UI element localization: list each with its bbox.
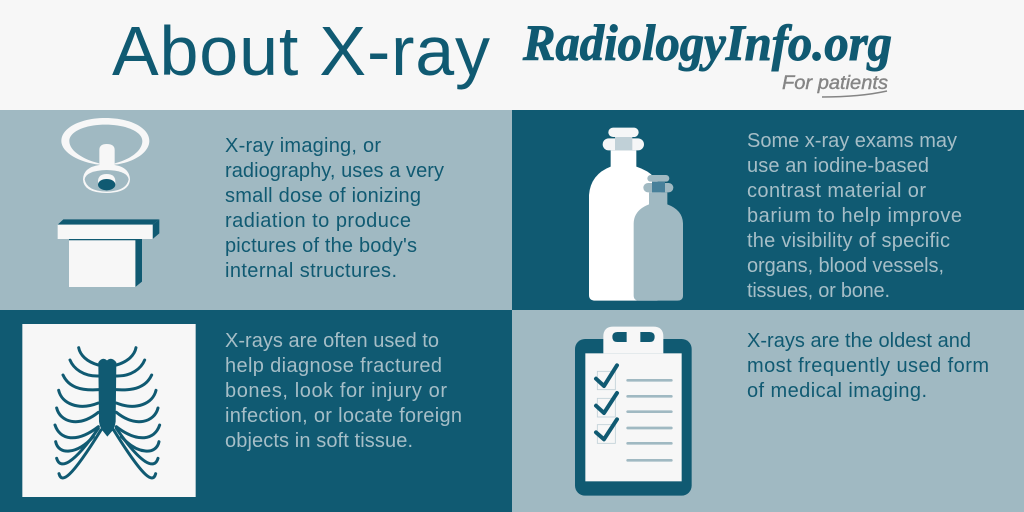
text: oldest imaging description: most frequently used form — [747, 355, 989, 377]
panel: diagnosis — [0, 310, 512, 512]
icon: bottles — [589, 128, 683, 301]
text: contrast description: use an iodine-based — [747, 155, 929, 177]
text: radiography description: small dose of ionizing — [225, 185, 421, 207]
text: contrast description: contrast material or — [747, 180, 926, 202]
text: diagnosis description: help diagnose fractured — [225, 355, 442, 377]
text: diagnosis description: infection, or locate foreign — [225, 405, 462, 427]
text: diagnosis description — [225, 330, 462, 452]
panel: oldest imaging — [512, 310, 1024, 512]
text: diagnosis description: objects in soft tissue. — [225, 430, 413, 452]
text: oldest imaging description — [747, 330, 989, 402]
text: contrast description — [747, 130, 962, 302]
logo: RadiologyInfo.org — [522, 16, 892, 97]
panel: radiography — [0, 110, 512, 310]
text: radiography description: internal structures. — [225, 260, 397, 282]
text: radiography description: X-ray imaging, or — [225, 135, 381, 157]
text: radiography description — [225, 135, 444, 282]
logo: RadiologyInfo.org: RadiologyInfo.org — [522, 16, 892, 72]
icon: clipboard — [575, 327, 692, 496]
logo: RadiologyInfo.org: For patients — [782, 73, 889, 94]
text: radiography description: radiography, uses a very — [225, 160, 444, 182]
text: contrast description: Some x-ray exams may — [747, 130, 957, 152]
text: diagnosis description: X-rays are often used to — [225, 330, 439, 352]
text: diagnosis description: bones, look for injury or — [225, 380, 447, 402]
panel: contrast material — [512, 110, 1024, 311]
text: contrast description: barium to help improve — [747, 205, 962, 227]
text: radiography description: pictures of the body's — [225, 235, 417, 257]
text: contrast description: the visibility of specific — [747, 230, 950, 252]
title: About X-ray — [112, 12, 490, 90]
text: radiography description: radiation to produce — [225, 210, 411, 232]
text: oldest imaging description: of medical imaging. — [747, 380, 927, 402]
icon: x-ray machine — [58, 118, 159, 287]
text: contrast description: tissues, or bone. — [747, 280, 890, 302]
text: contrast description: organs, blood vessels, — [747, 255, 944, 277]
icon: rib cage — [22, 324, 196, 497]
panel: header — [0, 0, 1024, 110]
text: oldest imaging description: X-rays are the oldest and — [747, 330, 971, 352]
